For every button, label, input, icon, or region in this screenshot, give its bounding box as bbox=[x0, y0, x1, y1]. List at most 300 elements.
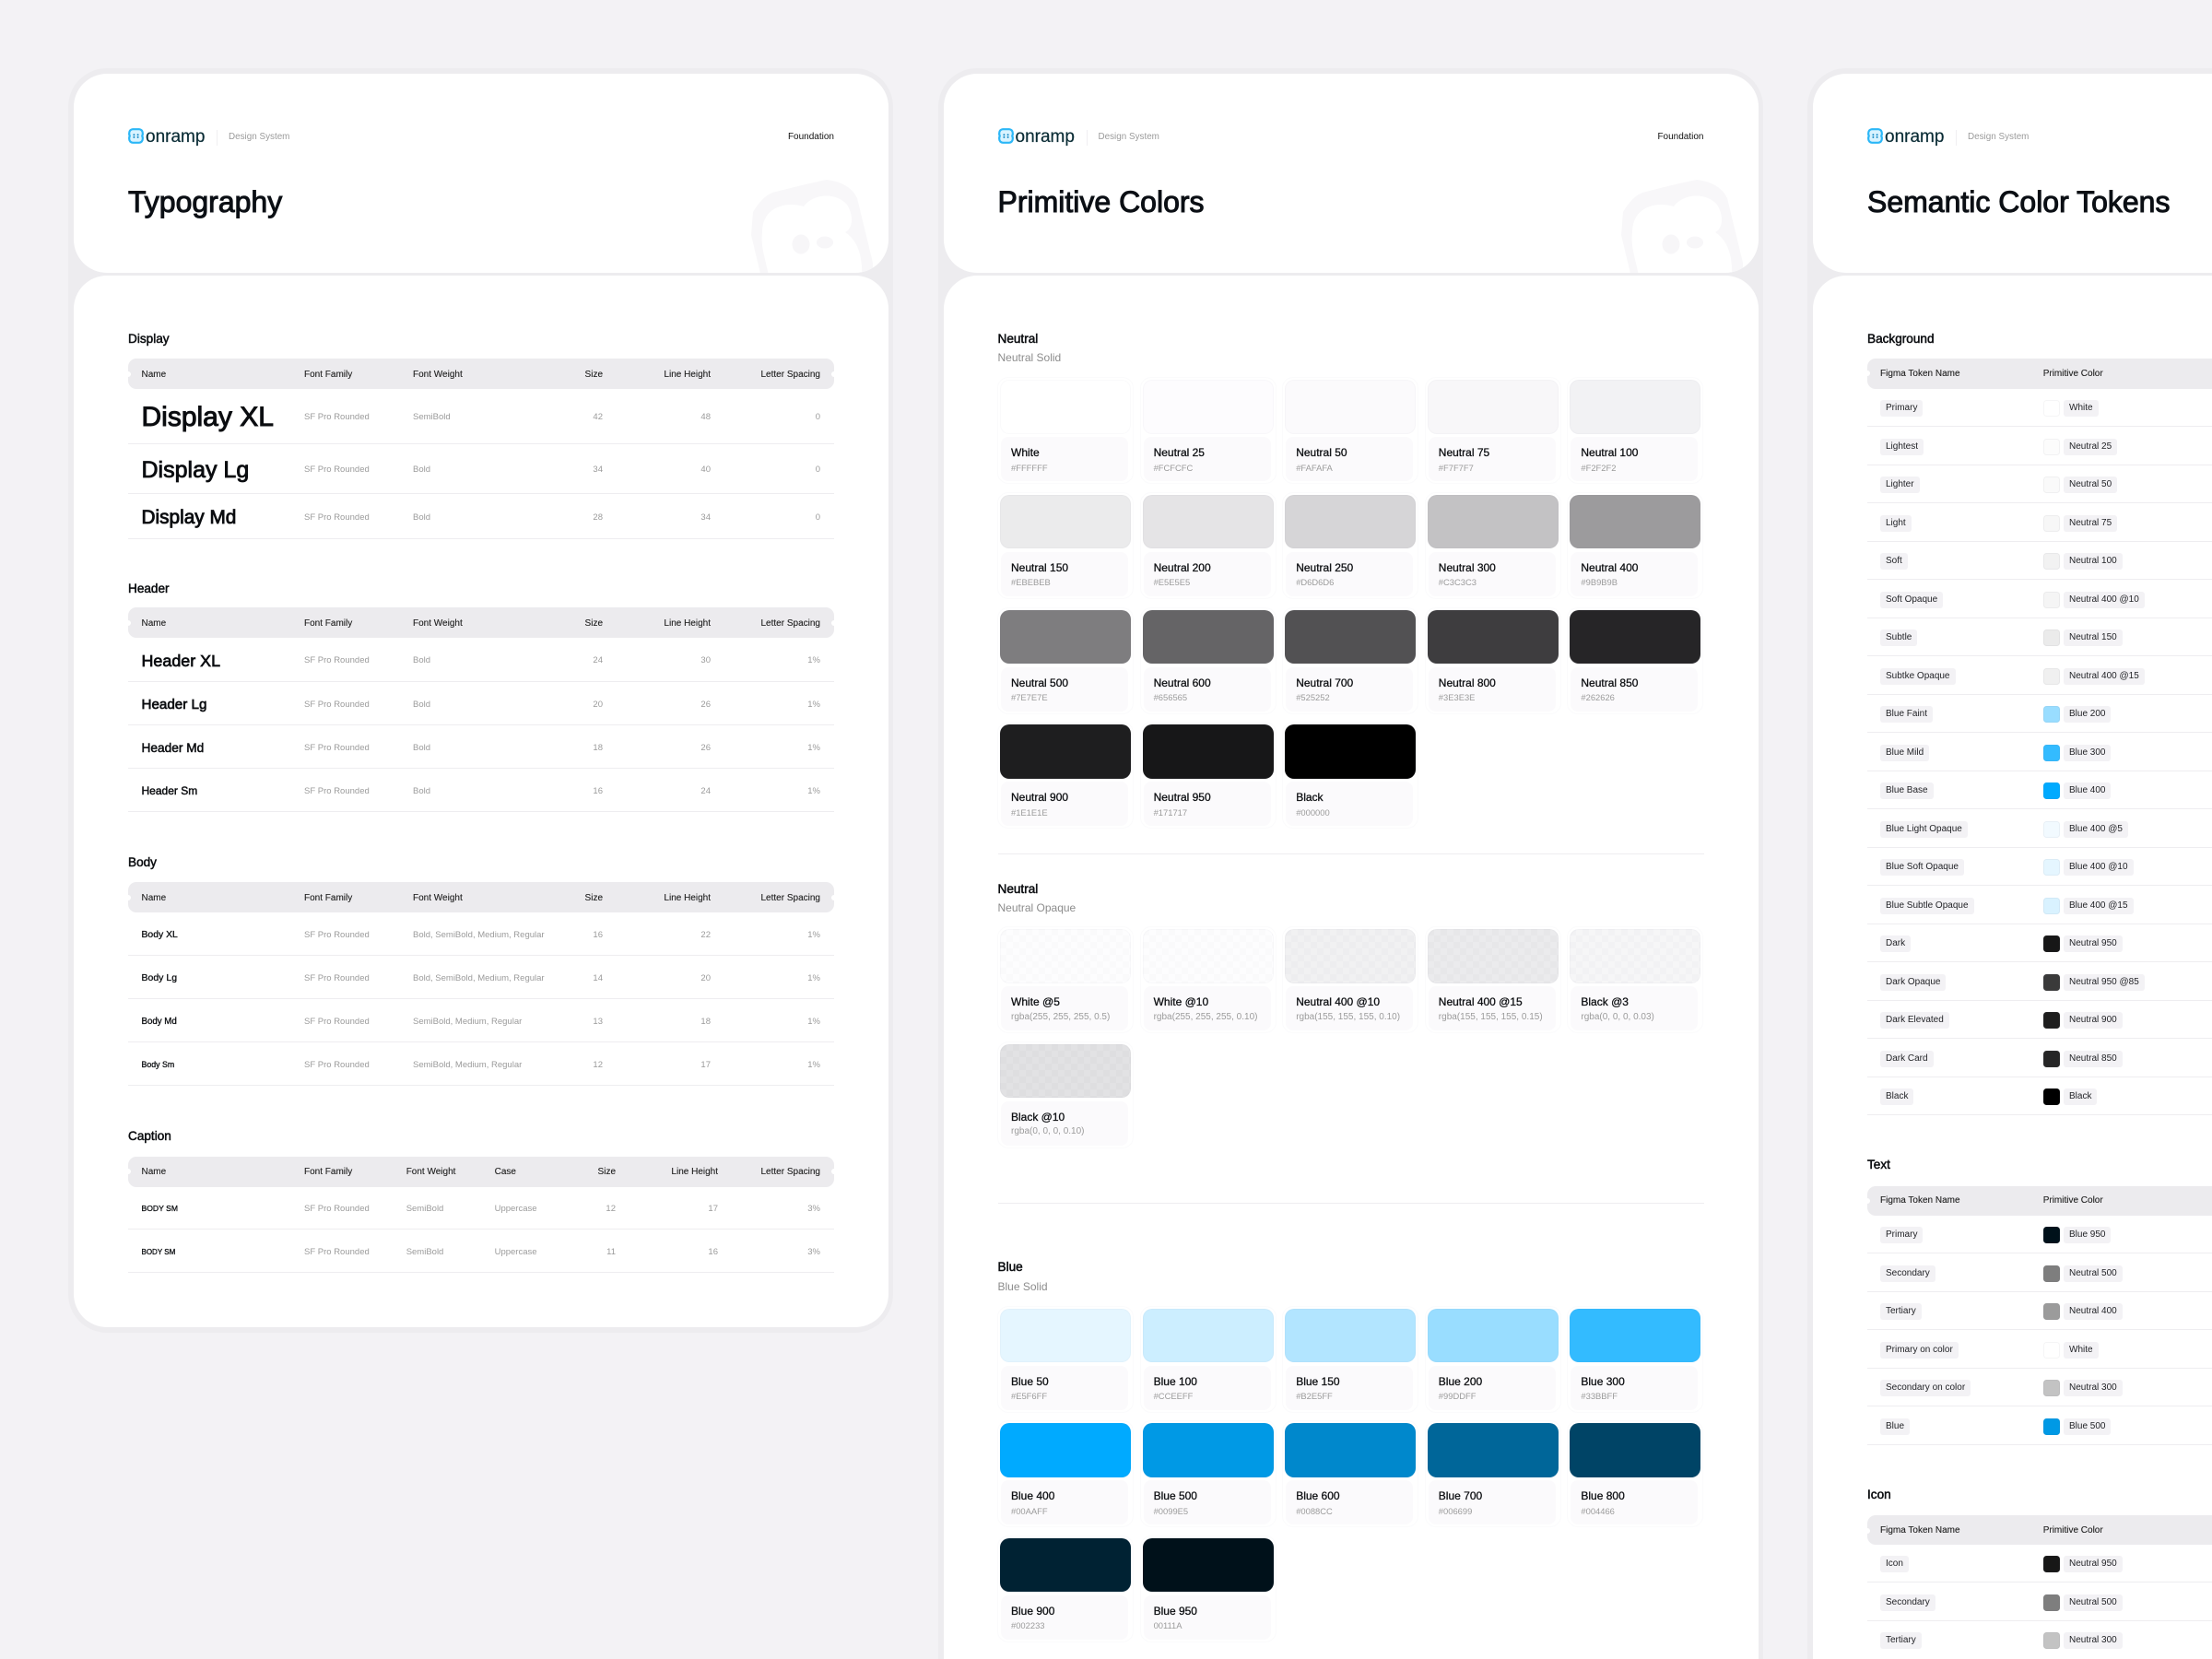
token: Lightest: Neutral 25 bbox=[2069, 441, 2112, 452]
token: Subtke Opaque: Subtke Opaque bbox=[1886, 671, 1950, 681]
token: Primary bbox=[1867, 1216, 2212, 1253]
row: Display XL: SF Pro Rounded bbox=[304, 412, 370, 422]
swatch: Blue 600: Blue 600 bbox=[1296, 1489, 1340, 1502]
swatch: Blue 600: #0088CC bbox=[1296, 1506, 1333, 1515]
swatch: Neutral 800: #3E3E3E bbox=[1439, 692, 1475, 702]
token: Secondary on color: Secondary on color bbox=[1886, 1382, 1965, 1393]
table: icon bbox=[1867, 1488, 2212, 1649]
swatch: Blue 900: Blue 900 bbox=[1011, 1605, 1054, 1618]
token: Secondary on color bbox=[1867, 1369, 2212, 1406]
swatch: Neutral 75 bbox=[1425, 377, 1561, 484]
swatch: Black bbox=[1282, 722, 1418, 829]
row: Body XL: Body XL bbox=[142, 930, 178, 940]
table: display bbox=[128, 332, 834, 539]
heading: background: Background bbox=[1867, 332, 1935, 346]
table header: Name bbox=[142, 893, 166, 903]
swatch: Blue 100: #CCEEFF bbox=[1154, 1391, 1193, 1401]
swatch: Blue 100 bbox=[1140, 1305, 1277, 1412]
token: Soft Opaque: Neutral 400 @10 bbox=[2069, 594, 2139, 605]
swatch: Neutral 250 bbox=[1282, 492, 1418, 599]
swatch: Blue 50: Blue 50 bbox=[1011, 1375, 1049, 1388]
token: Blue Light Opaque bbox=[1867, 809, 2212, 848]
row: Header XL: SF Pro Rounded bbox=[304, 655, 370, 665]
row: Display Lg: 40 bbox=[700, 465, 711, 475]
token: Icon: Icon bbox=[1886, 1559, 1903, 1569]
row: Header Md: 1% bbox=[807, 743, 820, 753]
row: Body Lg bbox=[128, 956, 834, 999]
swatch: Neutral 400 @15 bbox=[1425, 926, 1561, 1033]
swatch: Blue 150: Blue 150 bbox=[1296, 1375, 1340, 1388]
token: Dark bbox=[1867, 924, 2212, 962]
swatch: Neutral 850 bbox=[1567, 606, 1703, 713]
swatch: Blue 800: Blue 800 bbox=[1581, 1489, 1625, 1502]
swatch: Neutral 600 bbox=[1140, 606, 1277, 713]
swatch: Blue 700: Blue 700 bbox=[1439, 1489, 1482, 1502]
swatch: Neutral 950 bbox=[1140, 722, 1277, 829]
row: Body Md: Body Md bbox=[142, 1017, 177, 1027]
token: Tertiary: Neutral 300 bbox=[2069, 1635, 2117, 1645]
token: Tertiary: Neutral 400 bbox=[2069, 1306, 2117, 1316]
token: Subtle: Neutral 150 bbox=[2069, 632, 2117, 642]
swatch: Blue 300: #33BBFF bbox=[1581, 1391, 1618, 1401]
row: Body XL: 22 bbox=[700, 930, 711, 940]
token: Secondary: Secondary bbox=[1886, 1268, 1930, 1278]
row: caption 11: SemiBold bbox=[406, 1247, 443, 1257]
swatch: Blue 50: #E5F6FF bbox=[1011, 1391, 1047, 1401]
heading: text: Text bbox=[1867, 1158, 1890, 1171]
row: caption 12: SF Pro Rounded bbox=[304, 1204, 370, 1214]
row: Display Lg bbox=[128, 444, 834, 494]
table header bbox=[1867, 1186, 2212, 1216]
swatch: Blue 300 bbox=[1567, 1305, 1703, 1412]
row: Body Sm: SemiBold, Medium, Regular bbox=[413, 1060, 522, 1070]
token: Primary bbox=[1867, 389, 2212, 427]
swatch: Neutral 200 bbox=[1140, 492, 1277, 599]
row: Body Md: 1% bbox=[807, 1017, 820, 1027]
row: Header Md bbox=[128, 725, 834, 769]
swatch: Neutral 700: Neutral 700 bbox=[1296, 677, 1353, 689]
token: Blue: Blue bbox=[1886, 1421, 1904, 1431]
token: Light bbox=[1867, 503, 2212, 542]
logo: onramp: onramp bbox=[146, 127, 205, 146]
table header: Size bbox=[585, 370, 603, 380]
row: caption 12: 3% bbox=[807, 1204, 820, 1214]
swatch: Neutral 850: Neutral 850 bbox=[1581, 677, 1638, 689]
swatch: Neutral 75: Neutral 75 bbox=[1439, 446, 1489, 459]
swatch: Blue 900 bbox=[997, 1535, 1134, 1642]
row: Header XL: 30 bbox=[700, 655, 711, 665]
token: Blue Soft Opaque: Blue 400 @10 bbox=[2069, 862, 2128, 872]
row: Header Sm: 16 bbox=[593, 786, 603, 796]
row: Body XL bbox=[128, 912, 834, 956]
swatch: Blue 900: #002233 bbox=[1011, 1620, 1045, 1630]
token: Light: Light bbox=[1886, 518, 1906, 528]
swatch: White @5: rgba(255, 255, 255, 0.5) bbox=[1011, 1012, 1110, 1021]
swatch: Neutral 600: #656565 bbox=[1154, 692, 1187, 702]
table header bbox=[128, 1156, 834, 1187]
token: Subtle: Subtle bbox=[1886, 632, 1912, 642]
token: Blue Faint: Blue Faint bbox=[1886, 709, 1927, 719]
group: neutral solid bbox=[997, 332, 1700, 817]
token: Secondary: Secondary bbox=[1886, 1597, 1930, 1607]
table header: Name bbox=[142, 618, 166, 629]
token: Lighter: Neutral 50 bbox=[2069, 479, 2112, 489]
table: text bbox=[1867, 1158, 2212, 1445]
table header: Line Height bbox=[664, 618, 711, 629]
token: Blue Light Opaque: Blue Light Opaque bbox=[1886, 824, 1962, 834]
row: Header Sm bbox=[128, 769, 834, 812]
row: Body Sm: 17 bbox=[700, 1060, 711, 1070]
table header: Case bbox=[495, 1167, 516, 1177]
swatch: Black: #000000 bbox=[1296, 807, 1330, 817]
icon: mascot watermark bbox=[1663, 234, 1703, 254]
heading: caption: Caption bbox=[128, 1129, 171, 1143]
swatch: White: #FFFFFF bbox=[1011, 463, 1048, 472]
table header: Name bbox=[142, 370, 166, 380]
swatch: Blue 600 bbox=[1282, 1420, 1418, 1527]
row: Header Md: 26 bbox=[700, 743, 711, 753]
row: caption 11: SF Pro Rounded bbox=[304, 1247, 370, 1257]
row: Display Md: Display Md bbox=[142, 507, 236, 528]
row: Display Lg: SF Pro Rounded bbox=[304, 465, 370, 475]
table header: Line Height bbox=[664, 370, 711, 380]
swatch: Neutral 250: Neutral 250 bbox=[1296, 560, 1353, 573]
swatch: Neutral 300: Neutral 300 bbox=[1439, 560, 1496, 573]
table header: Font Weight bbox=[413, 618, 463, 629]
logo: onramp: Design System bbox=[229, 132, 289, 142]
row: Header Lg bbox=[128, 682, 834, 725]
swatch: White @10 bbox=[1140, 926, 1277, 1033]
token: Blue Mild bbox=[1867, 733, 2212, 771]
swatch: Neutral 400 @10 bbox=[1282, 926, 1418, 1033]
row: Body Md: SF Pro Rounded bbox=[304, 1017, 370, 1027]
token: Tertiary: Tertiary bbox=[1886, 1635, 1916, 1645]
table header: Primitive Color bbox=[2043, 369, 2103, 379]
token: Lighter: Lighter bbox=[1886, 479, 1914, 489]
row: Display XL: 48 bbox=[700, 412, 711, 422]
row: Header Sm: Header Sm bbox=[142, 784, 197, 797]
row: caption 11: 16 bbox=[708, 1247, 718, 1257]
swatch: Neutral 900: #1E1E1E bbox=[1011, 807, 1048, 817]
subheading: neutral solid: Neutral Solid bbox=[997, 351, 1061, 364]
swatch: Neutral 150: Neutral 150 bbox=[1011, 560, 1068, 573]
token: Soft Opaque bbox=[1867, 580, 2212, 618]
row: Header Md: SF Pro Rounded bbox=[304, 743, 370, 753]
token: Blue bbox=[1867, 1406, 2212, 1445]
swatch: Blue 200: #99DDFF bbox=[1439, 1391, 1476, 1401]
row: Body Sm: Body Sm bbox=[142, 1060, 174, 1069]
row: Body Md: 18 bbox=[700, 1017, 711, 1027]
header: typography bbox=[74, 74, 888, 273]
row: Header Lg: 20 bbox=[593, 700, 603, 710]
swatch: Blue 500: Blue 500 bbox=[1154, 1489, 1197, 1502]
row: Header Sm: SF Pro Rounded bbox=[304, 786, 370, 796]
token: Tertiary: Tertiary bbox=[1886, 1306, 1916, 1316]
panel: color swatches bbox=[944, 276, 1759, 1659]
heading: icon: Icon bbox=[1867, 1488, 1891, 1501]
swatch: Blue 800: #004466 bbox=[1581, 1506, 1615, 1515]
token: Soft bbox=[1867, 542, 2212, 580]
panel: typography card bbox=[68, 68, 893, 1333]
swatch: Blue 950 bbox=[1140, 1535, 1277, 1642]
heading: neutral: Neutral bbox=[997, 332, 1038, 346]
row: Header Lg: Header Lg bbox=[142, 697, 206, 712]
token: Black: Black bbox=[2069, 1091, 2091, 1101]
swatch: Blue 100: Blue 100 bbox=[1154, 1375, 1197, 1388]
swatch: Neutral 50: #FAFAFA bbox=[1296, 463, 1333, 472]
swatch: Neutral 50: Neutral 50 bbox=[1296, 446, 1347, 459]
table header: Line Height bbox=[671, 1167, 718, 1177]
row: Header Lg: SF Pro Rounded bbox=[304, 700, 370, 710]
swatch: Neutral 75: #F7F7F7 bbox=[1439, 463, 1474, 472]
swatch: Black: Black bbox=[1296, 791, 1324, 804]
table header: Name bbox=[142, 1167, 166, 1177]
row: Display Md: 34 bbox=[700, 512, 711, 523]
swatch: Neutral 950: #171717 bbox=[1154, 807, 1187, 817]
swatch: Neutral 100: Neutral 100 bbox=[1581, 446, 1638, 459]
token: Dark Card: Dark Card bbox=[1886, 1053, 1928, 1064]
swatch: Neutral 200: #E5E5E5 bbox=[1154, 577, 1190, 587]
token: Blue: Blue 500 bbox=[2069, 1421, 2105, 1431]
table header: Figma Token Name bbox=[1880, 1195, 1960, 1206]
header: primitive colors bbox=[944, 74, 1759, 273]
row: caption 12: Uppercase bbox=[495, 1204, 537, 1214]
swatch: Neutral 100 bbox=[1567, 377, 1703, 484]
label: foundation: Foundation bbox=[788, 132, 834, 142]
row: Header Md: Header Md bbox=[142, 741, 204, 755]
swatch: Blue 950: Blue 950 bbox=[1154, 1605, 1197, 1618]
swatch: Black @10: rgba(0, 0, 0, 0.10) bbox=[1011, 1126, 1084, 1136]
token: Subtke Opaque: Neutral 400 @15 bbox=[2069, 671, 2139, 681]
token: Dark: Neutral 950 bbox=[2069, 938, 2117, 948]
swatch: Neutral 25: Neutral 25 bbox=[1154, 446, 1205, 459]
row: caption 11: Uppercase bbox=[495, 1247, 537, 1257]
row: Display XL: 42 bbox=[593, 412, 603, 422]
swatch: Neutral 400 @10: Neutral 400 @10 bbox=[1296, 995, 1380, 1008]
row: Display Md: 0 bbox=[816, 512, 820, 523]
title: Primitive Colors bbox=[997, 185, 1205, 218]
row: caption 11: BODY SM bbox=[142, 1248, 175, 1256]
icon: mascot watermark bbox=[793, 234, 833, 254]
row: Display Lg: 34 bbox=[593, 465, 603, 475]
row: Body Lg: Body Lg bbox=[142, 972, 177, 983]
swatch: Blue 700 bbox=[1425, 1420, 1561, 1527]
table header bbox=[128, 607, 834, 638]
token: Soft Opaque: Soft Opaque bbox=[1886, 594, 1937, 605]
row: Header XL bbox=[128, 638, 834, 682]
swatch: White @5 bbox=[997, 926, 1134, 1033]
token: Secondary: Neutral 500 bbox=[2069, 1268, 2117, 1278]
token: Subtke Opaque bbox=[1867, 656, 2212, 695]
token: Black: Black bbox=[1886, 1091, 1908, 1101]
swatch: Neutral 500: Neutral 500 bbox=[1011, 677, 1068, 689]
row: caption 12: 17 bbox=[708, 1204, 718, 1214]
swatch: Neutral 500 bbox=[997, 606, 1134, 713]
row: Display Md: Bold bbox=[413, 512, 430, 523]
token: Dark Opaque: Dark Opaque bbox=[1886, 977, 1940, 987]
token: Soft: Neutral 100 bbox=[2069, 556, 2117, 566]
swatch: Blue 200: Blue 200 bbox=[1439, 1375, 1482, 1388]
token: Blue Faint: Blue 200 bbox=[2069, 709, 2105, 719]
table header: Letter Spacing bbox=[761, 893, 820, 903]
swatch: Blue 700: #006699 bbox=[1439, 1506, 1472, 1515]
swatch: Blue 50 bbox=[997, 1305, 1134, 1412]
row: caption 12: 12 bbox=[606, 1204, 616, 1214]
logo: onramp: onramp bbox=[1016, 127, 1075, 146]
token: Lightest bbox=[1867, 427, 2212, 465]
row: Body Sm: SF Pro Rounded bbox=[304, 1060, 370, 1070]
row: Header Md: Bold bbox=[413, 743, 430, 753]
table header: Font Weight bbox=[413, 893, 463, 903]
token: Blue Light Opaque: Blue 400 @5 bbox=[2069, 824, 2123, 834]
panel: primitive colors card bbox=[938, 68, 1763, 1659]
token: Dark Opaque bbox=[1867, 962, 2212, 1001]
row: Body Lg: 14 bbox=[593, 973, 603, 983]
table header bbox=[1867, 1515, 2212, 1545]
row: Body Lg: 20 bbox=[700, 973, 711, 983]
row: Display Md: 28 bbox=[593, 512, 603, 523]
row: Header Sm: Bold bbox=[413, 786, 430, 796]
row: Body Sm bbox=[128, 1042, 834, 1086]
row: Header XL: Header XL bbox=[142, 652, 220, 670]
table header bbox=[128, 359, 834, 389]
token: Soft: Soft bbox=[1886, 556, 1902, 566]
swatch: Black @10: Black @10 bbox=[1011, 1111, 1065, 1124]
swatch: Neutral 400: #9B9B9B bbox=[1581, 577, 1618, 587]
swatch: Neutral 400 bbox=[1567, 492, 1703, 599]
row: Body Sm: 12 bbox=[593, 1060, 603, 1070]
token: Dark Card: Neutral 850 bbox=[2069, 1053, 2117, 1064]
token: Lightest: Lightest bbox=[1886, 441, 1918, 452]
swatch: Neutral 900: Neutral 900 bbox=[1011, 791, 1068, 804]
table header: Primitive Color bbox=[2043, 1525, 2103, 1535]
logo: onramp bbox=[128, 127, 289, 146]
row: Body XL: Bold, SemiBold, Medium, Regular bbox=[413, 930, 545, 940]
token: Primary: Primary bbox=[1886, 1230, 1917, 1240]
swatch: Neutral 50 bbox=[1282, 377, 1418, 484]
table header: Letter Spacing bbox=[761, 1167, 820, 1177]
row: Display Lg: 0 bbox=[816, 465, 820, 475]
swatch: White: White bbox=[1011, 446, 1040, 459]
logo: onramp: onramp bbox=[1885, 127, 1944, 146]
swatch: White @10: rgba(255, 255, 255, 0.10) bbox=[1154, 1012, 1257, 1021]
token: Blue Soft Opaque: Blue Soft Opaque bbox=[1886, 862, 1959, 872]
title: Typography bbox=[128, 185, 282, 218]
table header: Size bbox=[585, 893, 603, 903]
token: Blue Subtle Opaque: Blue 400 @15 bbox=[2069, 900, 2128, 911]
token: Blue Mild: Blue Mild bbox=[1886, 747, 1924, 758]
swatch: Neutral 400: Neutral 400 bbox=[1581, 560, 1638, 573]
swatch: Black @10 bbox=[997, 1041, 1134, 1148]
swatch: White bbox=[997, 377, 1134, 484]
row: Display Md bbox=[128, 494, 834, 539]
heading: blue: Blue bbox=[997, 1260, 1023, 1274]
row: Display XL: Display XL bbox=[142, 402, 274, 432]
token: Secondary on color: Neutral 300 bbox=[2069, 1382, 2117, 1393]
token: Blue Subtle Opaque: Blue Subtle Opaque bbox=[1886, 900, 1969, 911]
table header: Primitive Color bbox=[2043, 1195, 2103, 1206]
token: Dark Elevated bbox=[1867, 1001, 2212, 1039]
header: semantic color tokens bbox=[1813, 74, 2212, 273]
subheading: blue solid: Blue Solid bbox=[997, 1280, 1048, 1293]
swatch: Blue 200 bbox=[1425, 1305, 1561, 1412]
row: Header Lg: Bold bbox=[413, 700, 430, 710]
table header: Size bbox=[598, 1167, 616, 1177]
row: Display Lg: Bold bbox=[413, 465, 430, 475]
table: header bbox=[128, 582, 834, 812]
token: Blue Base: Blue Base bbox=[1886, 785, 1928, 795]
swatch: Neutral 200: Neutral 200 bbox=[1154, 560, 1211, 573]
swatch: Black @3: Black @3 bbox=[1581, 995, 1629, 1008]
swatch: Neutral 25 bbox=[1140, 377, 1277, 484]
swatch: Neutral 700 bbox=[1282, 606, 1418, 713]
swatch: Neutral 700: #525252 bbox=[1296, 692, 1330, 702]
row: Body XL: 1% bbox=[807, 930, 820, 940]
row: Body Md bbox=[128, 999, 834, 1042]
swatch: Neutral 300 bbox=[1425, 492, 1561, 599]
token: Secondary: Neutral 500 bbox=[2069, 1597, 2117, 1607]
row: Body Lg: Bold, SemiBold, Medium, Regular bbox=[413, 973, 545, 983]
row: Body Md: SemiBold, Medium, Regular bbox=[413, 1017, 522, 1027]
table: caption bbox=[128, 1129, 834, 1273]
logo: onramp: Design System bbox=[1968, 132, 2029, 142]
table header: Font Family bbox=[304, 893, 352, 903]
token: Icon: Neutral 950 bbox=[2069, 1559, 2117, 1569]
heading: body: Body bbox=[128, 855, 157, 869]
token: Primary: Blue 950 bbox=[2069, 1230, 2105, 1240]
table header: Font Weight bbox=[413, 370, 463, 380]
swatch: Neutral 800 bbox=[1425, 606, 1561, 713]
title: Semantic Color Tokens bbox=[1867, 185, 2170, 218]
token: Blue Faint bbox=[1867, 695, 2212, 733]
row: Header XL: Bold bbox=[413, 655, 430, 665]
heading: display: Display bbox=[128, 332, 170, 346]
token: Lighter bbox=[1867, 465, 2212, 503]
row: Header XL: 1% bbox=[807, 655, 820, 665]
row: Header Sm: 24 bbox=[700, 786, 711, 796]
swatch: Blue 800 bbox=[1567, 1420, 1703, 1527]
token: Primary on color: Primary on color bbox=[1886, 1345, 1953, 1355]
heading: header: Header bbox=[128, 582, 170, 595]
row: Body Lg: 1% bbox=[807, 973, 820, 983]
row: caption 12: BODY SM bbox=[142, 1204, 178, 1213]
row: Header Sm: 1% bbox=[807, 786, 820, 796]
swatch: Blue 400 bbox=[997, 1420, 1134, 1527]
swatch: Blue 400: Blue 400 bbox=[1011, 1489, 1054, 1502]
token: Secondary bbox=[1867, 1583, 2212, 1621]
swatch: Neutral 150: #EBEBEB bbox=[1011, 577, 1051, 587]
row: Header Lg: 26 bbox=[700, 700, 711, 710]
token: Primary: Primary bbox=[1886, 403, 1917, 413]
token: Primary on color bbox=[1867, 1330, 2212, 1369]
swatch: Neutral 950: Neutral 950 bbox=[1154, 791, 1211, 804]
row: Body XL: SF Pro Rounded bbox=[304, 930, 370, 940]
token: Primary on color: White bbox=[2069, 1345, 2093, 1355]
logo: onramp bbox=[998, 127, 1159, 146]
token: Tertiary bbox=[1867, 1292, 2212, 1330]
table header: Font Family bbox=[304, 370, 352, 380]
row: Body XL: 16 bbox=[593, 930, 603, 940]
swatch: Neutral 600: Neutral 600 bbox=[1154, 677, 1211, 689]
table header bbox=[1867, 358, 2212, 389]
row: caption 12: SemiBold bbox=[406, 1204, 443, 1214]
subheading: neutral opaque: Neutral Opaque bbox=[997, 901, 1076, 914]
table: background bbox=[1867, 332, 2212, 1115]
swatch: Blue 300: Blue 300 bbox=[1581, 1375, 1625, 1388]
row: Display XL bbox=[128, 389, 834, 444]
swatch: Blue 400: #00AAFF bbox=[1011, 1506, 1048, 1515]
table header: Font Family bbox=[304, 618, 352, 629]
